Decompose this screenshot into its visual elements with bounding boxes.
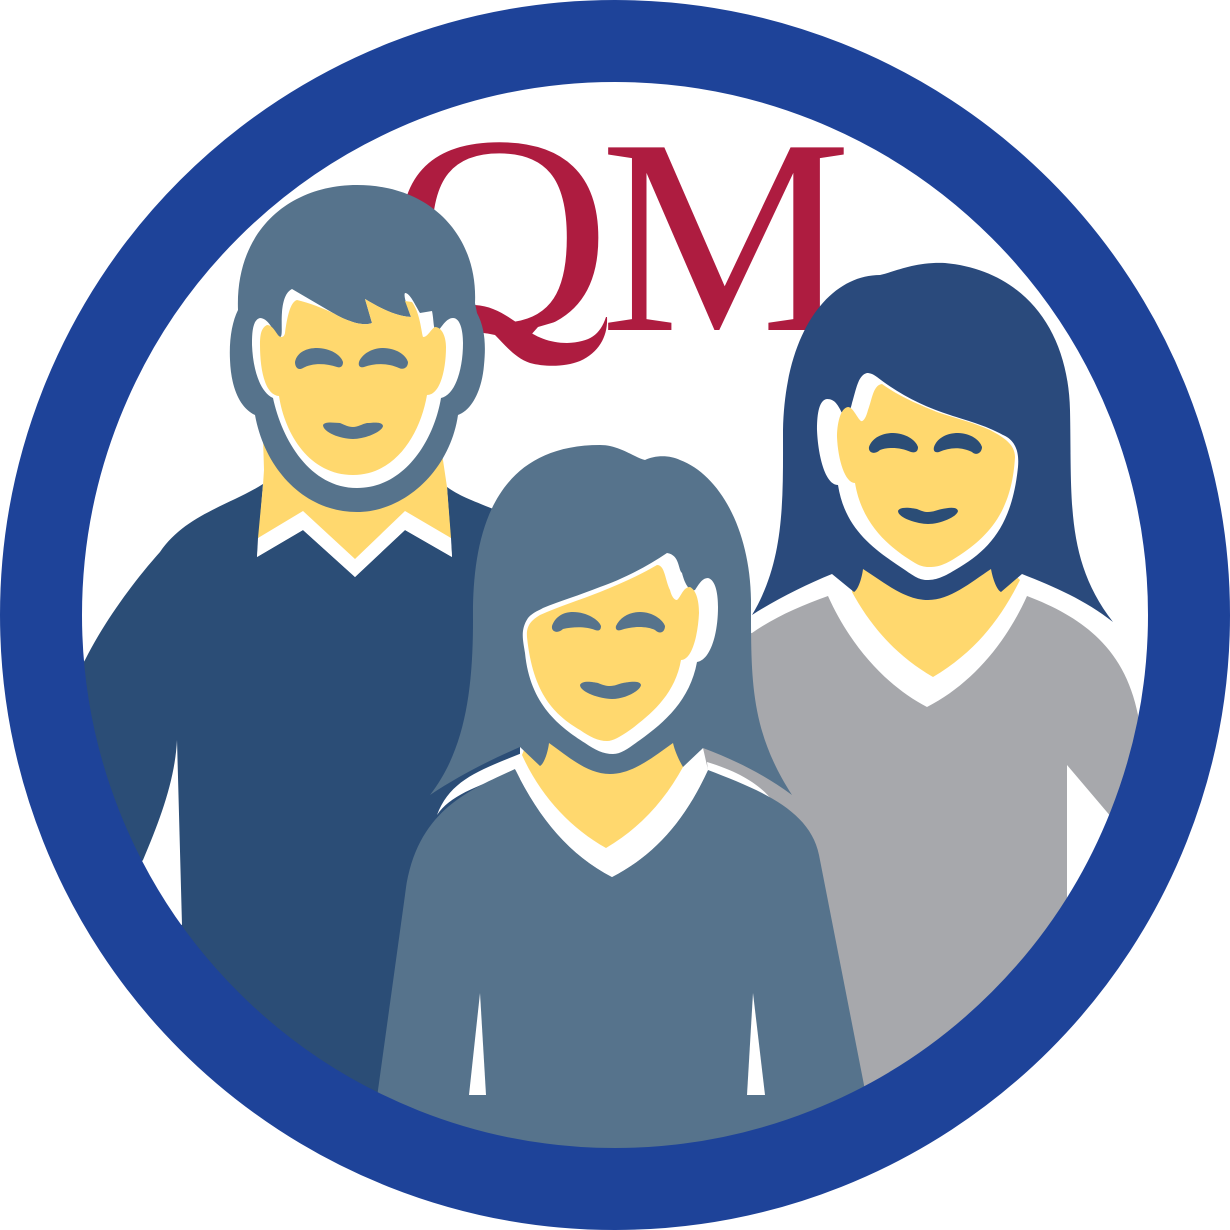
woman hair (752, 263, 1113, 622)
woman mouth (898, 508, 958, 524)
girl shoulder highlight right (707, 762, 772, 800)
girl hair (430, 445, 792, 795)
person: man, left (84, 185, 520, 1092)
girl shoulder highlight left (437, 753, 522, 815)
man neck (258, 437, 451, 559)
man face outline and ears (252, 289, 463, 488)
girl collar (515, 748, 708, 877)
girl sweater (370, 769, 875, 1160)
girl mouth (580, 682, 641, 699)
man right eye (359, 348, 408, 369)
girl neck (522, 743, 684, 848)
woman sweater (700, 596, 1138, 1086)
girl face (527, 565, 699, 741)
man collar (257, 530, 452, 577)
logo: QM letters: Q (388, 77, 611, 393)
girl right eye (616, 612, 665, 633)
logo: QM letters: M (600, 82, 852, 391)
man hair (230, 185, 485, 512)
woman face outline and ears (817, 373, 1018, 580)
girl face outline and ear (523, 553, 718, 754)
woman right eye (934, 433, 982, 454)
man face (260, 299, 446, 475)
woman left eye (869, 433, 918, 453)
woman arm gap (1067, 765, 1110, 898)
woman neck (852, 560, 1020, 677)
people and logo group (84, 142, 1138, 1148)
man left eye (295, 348, 343, 369)
man arm gap (142, 740, 182, 925)
person: girl, centre (370, 445, 875, 1160)
man sweater (84, 484, 520, 1092)
man mouth (323, 422, 383, 439)
girl arm gap left (469, 993, 486, 1095)
woman face (837, 384, 1015, 567)
logo: QM letters (408, 142, 844, 366)
person: woman, right (700, 262, 1138, 1086)
girl left eye (552, 612, 601, 632)
girl arm gap right (747, 993, 765, 1095)
